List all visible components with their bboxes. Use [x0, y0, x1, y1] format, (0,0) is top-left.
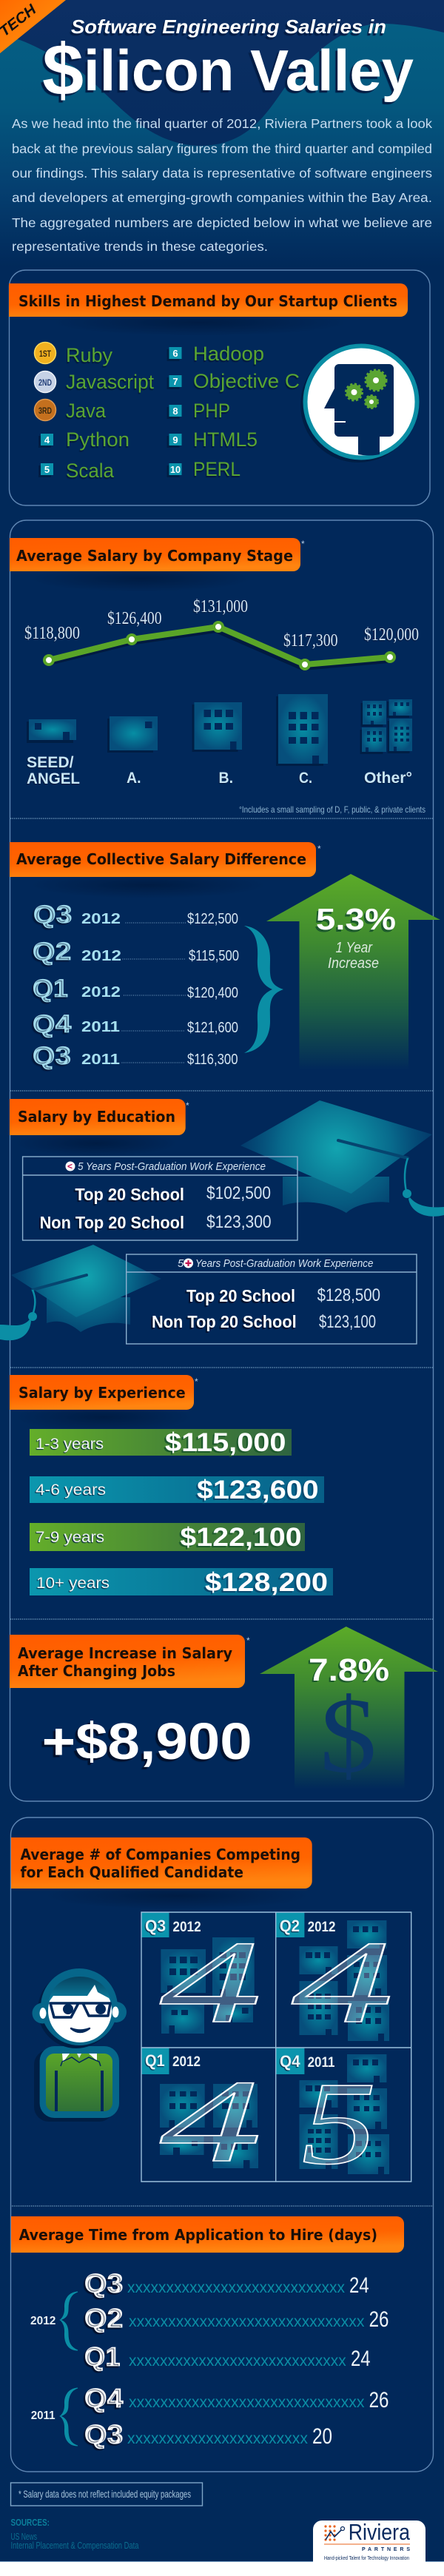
stage labels: C.	[299, 770, 312, 787]
bar: 7-9 years: 7-9 years	[36, 1529, 104, 1546]
arrow caption: 1 Year	[336, 940, 373, 956]
icon: graduation cap left	[0, 1245, 161, 1340]
grid lines	[141, 1912, 411, 2182]
bar: 10+ years: 10+ years	[36, 1575, 110, 1592]
rank squares	[38, 347, 182, 477]
quarter rows: $120,400	[187, 985, 238, 1001]
heading: education: Salary by Education	[18, 1108, 175, 1126]
bar: 4-6 years	[30, 1476, 324, 1504]
skills list: PHP	[193, 400, 230, 422]
quarter tag	[141, 2048, 169, 2074]
row: Q3 2012: xxxxxxxxxxxxxxxxxxxxxxxxxxxx	[127, 2279, 345, 2296]
section: companies competing	[11, 1837, 411, 2189]
big increase value: +$8,900	[42, 1712, 252, 1770]
logo partners: PARTNERS	[362, 2547, 410, 2552]
section: time to hire	[11, 2216, 404, 2449]
chart values: $120,000	[364, 625, 419, 645]
heading: skills	[9, 283, 408, 317]
logo: Riviera Partners	[313, 2519, 426, 2562]
heading: increase	[10, 1635, 245, 1688]
heading shadow	[30, 565, 252, 592]
heading: increase: Average Increase in Salary	[18, 1644, 232, 1662]
quarter rows: $122,500	[187, 911, 238, 927]
row: Q2 2012: xxxxxxxxxxxxxxxxxxxxxxxxxxxxxx	[129, 2313, 365, 2330]
count: 4	[292, 1916, 394, 2048]
stage labels: B.	[219, 770, 233, 787]
row: Q3 2011: 20	[312, 2424, 332, 2449]
chart values: $118,800	[24, 624, 80, 643]
stage labels: A.	[127, 770, 141, 787]
title line 2: ilicon Valley	[84, 38, 414, 103]
skills list: Ruby	[66, 344, 112, 366]
sources: SOURCES:	[10, 2517, 50, 2528]
intro paragraph: and developers at emerging-growth companies within the Bay Area.	[12, 190, 432, 205]
intro paragraph: back at the previous salary figures from the third quarter and compiled	[12, 141, 432, 156]
cell: Q4 2011	[276, 2048, 389, 2189]
heading: company stage: Average Salary by Company Stage	[16, 547, 293, 565]
divider	[10, 1367, 433, 1368]
white page footer	[0, 2562, 444, 2576]
skills list	[66, 343, 300, 482]
quarter label: Q2	[280, 1917, 300, 1935]
bar: 10+ years: $128,200	[205, 1568, 328, 1597]
intro paragraph: representative trends in these categories.	[12, 239, 268, 254]
panel outline	[10, 520, 434, 1801]
quarter rows: 2011	[81, 1052, 120, 1068]
logo tagline: Hand-picked Talent for Technology Innovation	[324, 2556, 409, 2561]
row: Q1 2012: xxxxxxxxxxxxxxxxxxxxxxxxxxxx	[129, 2353, 346, 2370]
skills list: Hadoop	[193, 343, 264, 365]
heading: companies competing	[11, 1837, 312, 1889]
table rows: $102,500	[206, 1183, 271, 1203]
rank squares: 4	[44, 434, 50, 445]
arrow caption: Increase	[328, 955, 379, 972]
sources: Internal Placement & Compensation Data	[10, 2540, 139, 2551]
panel: skills in demand	[9, 270, 430, 505]
rank squares: 5	[44, 464, 50, 475]
brace: 2012	[61, 2292, 78, 2350]
quarter tag	[141, 1912, 169, 1937]
panel: salary sections	[10, 520, 434, 1801]
row: Q3 2011	[84, 2419, 332, 2449]
table rows: $128,500	[317, 1285, 380, 1305]
row: Q1 2012	[84, 2341, 371, 2372]
chart values: $131,000	[193, 597, 248, 616]
section: increase after changing jobs	[10, 1627, 438, 1795]
table rows: $123,300	[206, 1212, 272, 1232]
skills list: Python	[66, 428, 130, 451]
table: over 5 years	[127, 1254, 417, 1344]
row: Q1 2012: Q1	[84, 2341, 121, 2372]
quarter rows: 2012	[81, 948, 121, 964]
year label: 2011	[308, 2055, 335, 2071]
bar: 7-9 years	[30, 1523, 305, 1552]
quarter rows: Q1	[33, 975, 68, 1003]
row: Q4 2011: xxxxxxxxxxxxxxxxxxxxxxxxxxxxxx	[129, 2394, 365, 2411]
row: Q4 2011: 26	[369, 2388, 389, 2412]
skills list: Objective C	[193, 370, 300, 392]
rank squares: 8	[172, 406, 178, 417]
divider	[10, 1618, 433, 1620]
panel: hiring competition and time	[10, 1817, 434, 2472]
table header: 5 Years Post-Graduation Work Experience	[78, 1160, 266, 1173]
heading: time to hire: Average Time from Application to Hire (days)	[19, 2226, 377, 2244]
skills list: Java	[66, 400, 107, 422]
medal: first: 1ST	[39, 349, 51, 359]
asterisk: *	[246, 1635, 250, 1646]
intro paragraph	[12, 116, 432, 254]
quarter rows: Q4	[33, 1010, 72, 1038]
asterisk: *	[195, 1376, 198, 1387]
quarter rows: Q3	[33, 901, 73, 929]
percent value: 7.8%	[309, 1652, 389, 1688]
year label: 2011: 2011	[31, 2409, 56, 2422]
intro paragraph: The aggregated numbers are depicted below in what we believe are	[12, 215, 432, 230]
row: Q3 2012: Q3	[84, 2268, 123, 2298]
icon: other buildings	[360, 699, 412, 754]
heading: collective salary difference: Average Collective Salary Difference	[16, 850, 306, 868]
candidate head	[33, 1968, 127, 2048]
year label: 2012	[172, 1920, 201, 1935]
rank squares: 7	[172, 376, 178, 387]
medal: second	[34, 371, 56, 392]
table: under 5 years	[23, 1157, 297, 1240]
orange corner triangle	[0, 0, 66, 53]
cell: Q2 2012	[276, 1912, 394, 2048]
arrow caption	[328, 940, 379, 972]
medal: second: 2ND	[38, 377, 52, 388]
table rows	[40, 1183, 272, 1232]
stage labels: Other°	[364, 770, 412, 787]
icon: candidate	[33, 1968, 127, 2122]
icon: less than	[65, 1161, 75, 1171]
divider	[12, 2205, 432, 2207]
row: Q3 2011: xxxxxxxxxxxxxxxxxxxxxxx	[127, 2430, 309, 2447]
buildings	[299, 1920, 389, 2041]
section: salary by experience	[10, 1375, 333, 1597]
quarter grid	[141, 1912, 411, 2189]
sources: US News	[10, 2531, 37, 2542]
bar: 4-6 years: 4-6 years	[36, 1482, 106, 1499]
equity note	[10, 2483, 203, 2506]
row: Q2 2012: 26	[369, 2307, 389, 2332]
quarter rows: $121,600	[187, 1020, 238, 1036]
heading shadow	[44, 1883, 311, 1909]
corner tag: tech	[0, 0, 66, 53]
footer edge line	[0, 2560, 444, 2562]
medal: third: 3RD	[38, 406, 52, 416]
sources	[10, 2517, 139, 2551]
icon: series A building	[107, 716, 158, 753]
skills list: PERL	[193, 458, 240, 480]
brace	[244, 926, 283, 1053]
bar: 4-6 years: $123,600	[197, 1476, 318, 1504]
heading shadow	[52, 309, 348, 336]
arrow: job change increase	[260, 1627, 438, 1795]
row: Q4 2011: Q4	[84, 2383, 123, 2413]
chart values: $117,300	[283, 631, 337, 650]
divider	[10, 1090, 433, 1092]
quarter rows	[33, 901, 239, 1070]
year label: 2012: 2012	[30, 2315, 56, 2327]
buildings	[160, 2084, 258, 2168]
section: average collective salary difference	[10, 842, 440, 1070]
bar: 1-3 years: 1-3 years	[36, 1436, 104, 1453]
skills list: Scala	[66, 460, 115, 482]
skills list: HTML5	[193, 428, 258, 451]
count: 4	[160, 1916, 262, 2048]
buildings	[299, 2054, 389, 2174]
logo rule	[324, 2543, 410, 2545]
table rows: Non Top 20 School	[40, 1213, 184, 1232]
equity note: * Salary data does not reflect included equity packages	[18, 2488, 191, 2500]
stage labels: SEED/	[27, 754, 74, 771]
heading: company stage	[10, 538, 300, 571]
title line 1: Software Engineering Salaries in	[71, 16, 386, 38]
rank squares: 6	[172, 348, 178, 359]
arrow: increase	[266, 874, 440, 1069]
table header number: 5	[178, 1257, 184, 1270]
intro paragraph: our findings. This salary data is representative of software engineers	[12, 166, 432, 181]
row: Q3 2012	[84, 2268, 369, 2298]
icon: series C building	[276, 694, 328, 766]
icon: seed building	[27, 719, 76, 743]
year label: 2012	[308, 1920, 336, 1935]
icon: series B building	[192, 702, 242, 752]
asterisk: *	[186, 1100, 189, 1111]
percent value: 5.3%	[316, 902, 396, 936]
chart values	[24, 597, 419, 650]
bar: 7-9 years: $122,100	[180, 1523, 302, 1552]
quarter rows: 2012	[81, 984, 121, 1001]
rank squares: 10	[170, 464, 181, 475]
asterisk: *	[301, 539, 305, 549]
table rows	[152, 1285, 380, 1332]
table header: Years Post-Graduation Work Experience	[195, 1257, 373, 1270]
quarter label: Q3	[145, 1917, 166, 1935]
dollar sign: $	[320, 1675, 377, 1795]
row: Q4 2011	[84, 2383, 389, 2413]
candidate body	[34, 2046, 119, 2122]
panel outline	[10, 1817, 434, 2472]
logo mark	[326, 2526, 345, 2540]
bar: 1-3 years	[30, 1428, 292, 1457]
heading: skills: Skills in Highest Demand by Our Startup Clients	[18, 292, 397, 310]
cell: Q1 2012	[141, 2048, 262, 2187]
quarter rows: $115,500	[189, 948, 239, 964]
section: salary by company stage	[10, 538, 426, 815]
count: 5	[302, 2057, 377, 2189]
quarter rows: $116,300	[187, 1052, 238, 1068]
panel outline	[9, 270, 430, 505]
medal: first	[34, 342, 56, 364]
stage labels: ANGEL	[27, 770, 80, 787]
asterisk: *	[317, 844, 321, 854]
heading shadow	[15, 1402, 192, 1432]
quarter rows: Q3	[33, 1042, 71, 1070]
bar: 10+ years	[30, 1568, 333, 1597]
table rows: Top 20 School	[186, 1286, 295, 1305]
quarter rows: 2012	[81, 911, 121, 927]
quarter label: Q1	[145, 2051, 165, 2070]
icon: graduation cap right	[240, 1100, 444, 1217]
quarter rows: Q2	[33, 938, 71, 966]
row: Q2 2012	[84, 2303, 389, 2333]
heading: education	[10, 1099, 186, 1135]
row: Q2 2012: Q2	[84, 2303, 123, 2333]
skills list: Javascript	[66, 371, 154, 393]
cell: Q3 2012	[141, 1912, 262, 2048]
quarter label: Q4	[280, 2052, 300, 2071]
quarter tag	[276, 1912, 304, 1937]
heading: experience	[10, 1375, 194, 1410]
row: Q3 2012: 24	[349, 2273, 369, 2298]
heading: experience: Salary by Experience	[18, 1384, 186, 1402]
heading shadow	[15, 1130, 178, 1157]
header teal wave	[0, 24, 444, 266]
rank squares: 9	[172, 434, 178, 445]
heading: collective salary difference	[10, 842, 316, 877]
intro paragraph: As we head into the final quarter of 2012, Riviera Partners took a look	[12, 116, 432, 131]
heading: companies competing: for Each Qualified Candidate	[21, 1863, 243, 1881]
icon: less than: <	[67, 1161, 73, 1171]
year label: 2012	[172, 2054, 201, 2070]
title	[42, 16, 414, 110]
table rows: Non Top 20 School	[152, 1312, 297, 1331]
medal: third	[34, 400, 56, 420]
header valley background	[0, 0, 444, 266]
section: salary by education	[0, 1099, 444, 1344]
quarter rows: 2011	[81, 1019, 120, 1035]
chart values: $126,400	[107, 609, 161, 628]
row: Q1 2012: 24	[351, 2347, 371, 2371]
bar: 1-3 years: $115,000	[165, 1428, 286, 1457]
line chart	[44, 622, 394, 669]
title line 2: $	[42, 29, 84, 110]
heading: time to hire	[11, 2216, 404, 2253]
buildings	[161, 1937, 255, 2034]
heading: companies competing: Average # of Companies Competing	[21, 1846, 300, 1863]
table rows: $123,100	[319, 1312, 376, 1332]
table rows: Top 20 School	[75, 1185, 184, 1204]
row: Q3 2011: Q3	[84, 2419, 123, 2449]
stage labels	[27, 754, 412, 787]
divider	[10, 818, 433, 819]
icon: plus	[184, 1258, 193, 1268]
count: 4	[160, 2055, 262, 2187]
heading shadow	[30, 872, 266, 898]
heading: increase: After Changing Jobs	[18, 1662, 175, 1680]
quarter tag	[276, 2048, 304, 2074]
logo wordmark: Riviera	[349, 2519, 411, 2545]
icon: head with gears	[300, 346, 417, 463]
brace: 2011	[61, 2388, 78, 2446]
